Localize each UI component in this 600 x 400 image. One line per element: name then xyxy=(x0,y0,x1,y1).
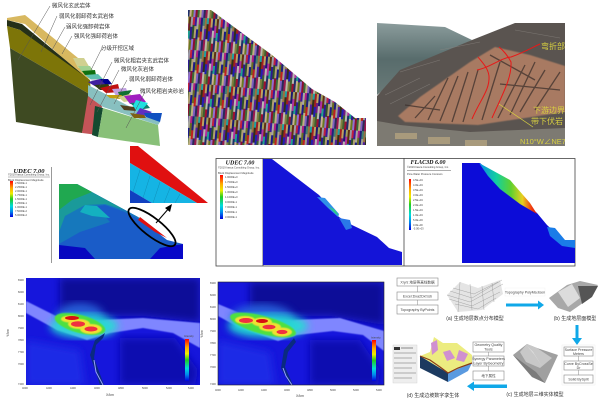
axis labels: 8200 xyxy=(210,293,216,297)
panel: UDEC slope model with zoom inset xyxy=(8,146,208,263)
UDEC result legend: 1.1000E+0 xyxy=(225,195,238,199)
UDEC legend: 1.0000E-1 xyxy=(15,205,28,209)
colour bar: Intensity xyxy=(371,336,381,340)
axis labels: 4000 xyxy=(215,388,221,392)
FLAC3D legend: 2.0E+04 xyxy=(413,203,423,207)
rock unit labels: 弱风化强卸荷岩体 xyxy=(66,22,111,30)
caption b: (b) 生成地层面模型 xyxy=(554,315,596,322)
caption d: (d) 生成边坡数字孪生体 xyxy=(407,392,459,399)
axis labels: 8300 xyxy=(18,278,24,282)
workflow step (c) boxes: Layer ByGeometry xyxy=(474,362,504,366)
axis labels: 8100 xyxy=(210,305,216,309)
workflow step (b) boxes xyxy=(562,345,595,385)
axis labels: 8200 xyxy=(18,290,24,294)
panel: UDEC displacement result xyxy=(218,159,402,265)
workflow step (a) boxes xyxy=(397,278,438,314)
red failure zone xyxy=(138,217,167,238)
UDEC result legend: UDEC 7.00 xyxy=(226,160,254,166)
axis labels: 8100 xyxy=(18,302,24,306)
function label xyxy=(505,288,545,296)
rock unit labels: 弱风化弱卸荷玄武岩体 xyxy=(59,12,115,20)
panel: heatmap right xyxy=(200,281,384,398)
plot area xyxy=(26,278,200,385)
rock unit labels: 强风化强卸荷岩体 xyxy=(74,32,119,40)
axis labels: 7900 xyxy=(18,326,24,330)
UDEC legend: 5.0000E-2 xyxy=(15,213,28,217)
colour 3D terrain model xyxy=(420,337,472,382)
workflow step (c) boxes: Synergy Parameters xyxy=(472,357,505,361)
workflow step (a) boxes: X/y/z 地层等高线数据 xyxy=(400,280,435,284)
UDEC result legend: 1.3000E+0 xyxy=(225,190,238,194)
rock joints xyxy=(405,55,560,122)
rock layers xyxy=(7,15,160,146)
ellipse highlight xyxy=(124,202,180,252)
axis labels: 5400 xyxy=(188,386,194,390)
axis labels xyxy=(200,281,382,398)
colour bar: Intensity xyxy=(184,334,194,338)
panel: field photo of rock slope xyxy=(377,23,573,146)
UDEC result legend: 5.0000E-1 xyxy=(225,210,238,214)
leader lines xyxy=(18,6,145,128)
workflow step (b) boxes: Solid BySplit xyxy=(568,378,589,382)
UDEC legend: 2.0000E-1 xyxy=(15,189,28,193)
red fault lines xyxy=(472,44,540,119)
FLAC3D legend: 3.5E+04 xyxy=(413,188,423,192)
axis labels: 7800 xyxy=(18,338,24,342)
axis labels: 5200 xyxy=(166,386,172,390)
solid terrain block xyxy=(513,344,558,383)
slip zone colour xyxy=(317,197,352,230)
panel: heatmap left xyxy=(6,278,200,397)
workflow step (c) boxes: Tools xyxy=(484,348,493,352)
axis labels: 5000 xyxy=(330,388,336,392)
UDEC legend xyxy=(8,167,52,263)
colour crescent xyxy=(479,163,537,214)
FLAC3D legend: 4.5E+04 xyxy=(413,178,423,182)
blue slope body xyxy=(263,159,402,265)
axis labels: 4600 xyxy=(94,386,100,390)
panel: FLAC3D pressure result xyxy=(407,160,575,263)
blue slope body xyxy=(462,163,575,263)
caption c: (c) 生成地层三维实体模型 xyxy=(506,391,564,398)
UDEC legend: Block Displacement Magnitude xyxy=(8,178,44,182)
UDEC result legend xyxy=(218,160,260,219)
axis labels: 5000 xyxy=(142,386,148,390)
axis labels: 5400 xyxy=(376,388,382,392)
axis labels: 7400 xyxy=(210,382,216,386)
axis labels: X/km xyxy=(106,393,114,397)
slope bedding texture xyxy=(385,30,560,104)
UDEC result legend: ©2019 Itasca Consulting Group, Inc. xyxy=(218,166,260,170)
FLAC3D legend xyxy=(407,160,451,230)
function label: Topography PolyMa.lisen xyxy=(505,290,545,294)
UDEC result legend: 1.9000E+0 xyxy=(225,175,238,179)
rock unit labels: 弱风化弱卸荷岩体 xyxy=(129,75,174,83)
FLAC3D legend: 1.5E+04 xyxy=(413,208,423,212)
yellow arrow line xyxy=(499,104,533,127)
axis labels: 4600 xyxy=(284,388,290,392)
excavation zone coloured blocks xyxy=(73,58,162,122)
colour bar xyxy=(371,336,381,381)
FLAC3D legend: ©2019 Itasca Consulting Group, Inc. xyxy=(407,165,449,169)
FLAC3D legend: 5.0E+03 xyxy=(413,218,423,222)
axis labels: 4400 xyxy=(70,386,76,390)
photo annotations: 带下伏岩 xyxy=(531,116,563,126)
workflow step (a) boxes: Topography ByPoints xyxy=(401,308,435,312)
axis labels: 7700 xyxy=(210,353,216,357)
axis labels: 7700 xyxy=(18,350,24,354)
caption a: (a) 生成地层数点分布模型 xyxy=(446,315,504,322)
photo annotations xyxy=(520,42,565,144)
wireframe point cloud xyxy=(447,280,503,312)
FLAC3D legend: -5.0E+03 xyxy=(413,226,424,230)
axis labels: 7400 xyxy=(18,382,24,386)
zoom inset xyxy=(130,146,208,203)
UDEC legend: UDEC 7.00 xyxy=(13,168,45,175)
FLAC3D legend: 1.0E+04 xyxy=(413,213,423,217)
UDEC result legend: 9.0000E-1 xyxy=(225,200,238,204)
axis labels: 4800 xyxy=(118,386,124,390)
plot area xyxy=(218,282,384,385)
FLAC3D legend: 4.0E+04 xyxy=(413,183,423,187)
photo annotations: 下游边界 xyxy=(533,105,565,115)
rock unit labels: 微风化灰岩体 xyxy=(121,65,155,73)
UDEC legend: 1.5000E-1 xyxy=(15,197,28,201)
UDEC legend: ©2019 Itasca Consulting Group, Inc. xyxy=(8,172,50,176)
UDEC result legend: 7.0000E-1 xyxy=(225,205,238,209)
UDEC legend: 2.5000E-1 xyxy=(15,181,28,185)
foreground blocks xyxy=(395,133,487,146)
workflow step (b) boxes: Dr xyxy=(577,366,581,370)
axis labels: 7900 xyxy=(210,329,216,333)
axis labels: 7600 xyxy=(18,362,24,366)
UDEC result legend: 1.7000E+0 xyxy=(225,180,238,184)
UDEC legend: 1.7500E-1 xyxy=(15,193,28,197)
road xyxy=(377,121,565,146)
UDEC legend: 1.2500E-1 xyxy=(15,201,28,205)
rock unit labels: 微风化粗岩夹砂岩 xyxy=(140,87,185,95)
axis labels: 4400 xyxy=(261,388,267,392)
UDEC result legend: 1.5000E+0 xyxy=(225,185,238,189)
axis labels: 7600 xyxy=(210,365,216,369)
axis labels: 8000 xyxy=(18,314,24,318)
panel: geological section model xyxy=(7,2,185,146)
axis labels: 4200 xyxy=(238,388,244,392)
axis labels: 7800 xyxy=(210,341,216,345)
axis labels: 4200 xyxy=(46,386,52,390)
workflow step (a) boxes: Excel:Dxa2Dxf.lsb xyxy=(403,294,432,298)
axis labels: 5200 xyxy=(353,388,359,392)
workflow step (c) boxes xyxy=(472,342,505,380)
pink rock face xyxy=(398,47,565,125)
arrow down xyxy=(572,325,582,345)
axis labels: X/km xyxy=(296,394,304,398)
panel: digital terrain modelling workflow xyxy=(393,278,598,399)
workflow step (c) boxes: 地下属性 xyxy=(481,373,496,378)
rock unit labels: 分级开挖区域 xyxy=(101,44,135,52)
workflow step (b) boxes: Curve ByCrossSe xyxy=(564,362,593,366)
panel: discrete block mosaic model xyxy=(188,10,366,145)
axis labels: Y/km xyxy=(200,330,204,338)
workflow step (b) boxes: Surface Pressure xyxy=(565,348,592,352)
axis labels: 4800 xyxy=(307,388,313,392)
arrow left xyxy=(467,382,507,391)
FLAC3D legend: 2.5E+04 xyxy=(413,198,423,202)
FLAC3D legend: FLAC3D 6.00 xyxy=(410,160,446,166)
axis labels: 4000 xyxy=(22,386,28,390)
software interface screenshot xyxy=(393,345,417,383)
axis labels xyxy=(6,278,194,397)
axis labels: 8000 xyxy=(210,317,216,321)
FLAC3D legend: Pore-Water Pressure Contours xyxy=(407,172,443,176)
arrow right xyxy=(506,300,544,310)
rock unit labels: 微风化粗岩夹玄武岩体 xyxy=(114,56,170,64)
rock unit labels xyxy=(52,2,185,95)
arrow to inset xyxy=(156,204,172,223)
rock unit labels: 微风化玄武岩体 xyxy=(52,2,91,10)
FLAC3D legend: 3.0E+04 xyxy=(413,193,423,197)
workflow step (c) boxes: Geometry Quality xyxy=(475,343,503,347)
plot border xyxy=(218,282,384,385)
UDEC legend: 7.5000E-2 xyxy=(15,209,28,213)
displacement contour slope xyxy=(59,184,183,259)
FLAC3D legend: 0.0E+00 xyxy=(413,223,423,227)
terrain surface xyxy=(549,281,598,312)
dark slope xyxy=(377,23,565,132)
UDEC result legend: 3.0000E-1 xyxy=(225,215,238,219)
UDEC result legend: Block Displacement Magnitude xyxy=(218,171,254,175)
colour bar xyxy=(184,334,194,381)
background sky and mountain xyxy=(377,23,472,95)
UDEC legend: 2.2500E-1 xyxy=(15,185,28,189)
photo annotations: 弯折部位 xyxy=(541,41,573,51)
axis labels: Y/km xyxy=(6,329,10,337)
photo annotations: N10°W∠NE75° xyxy=(520,137,573,146)
panel: frame for UDEC and FLAC3D results xyxy=(216,158,575,266)
workflow step (b) boxes: Meters xyxy=(573,352,584,356)
axis labels: 8300 xyxy=(210,281,216,285)
toe colour band xyxy=(547,227,575,248)
